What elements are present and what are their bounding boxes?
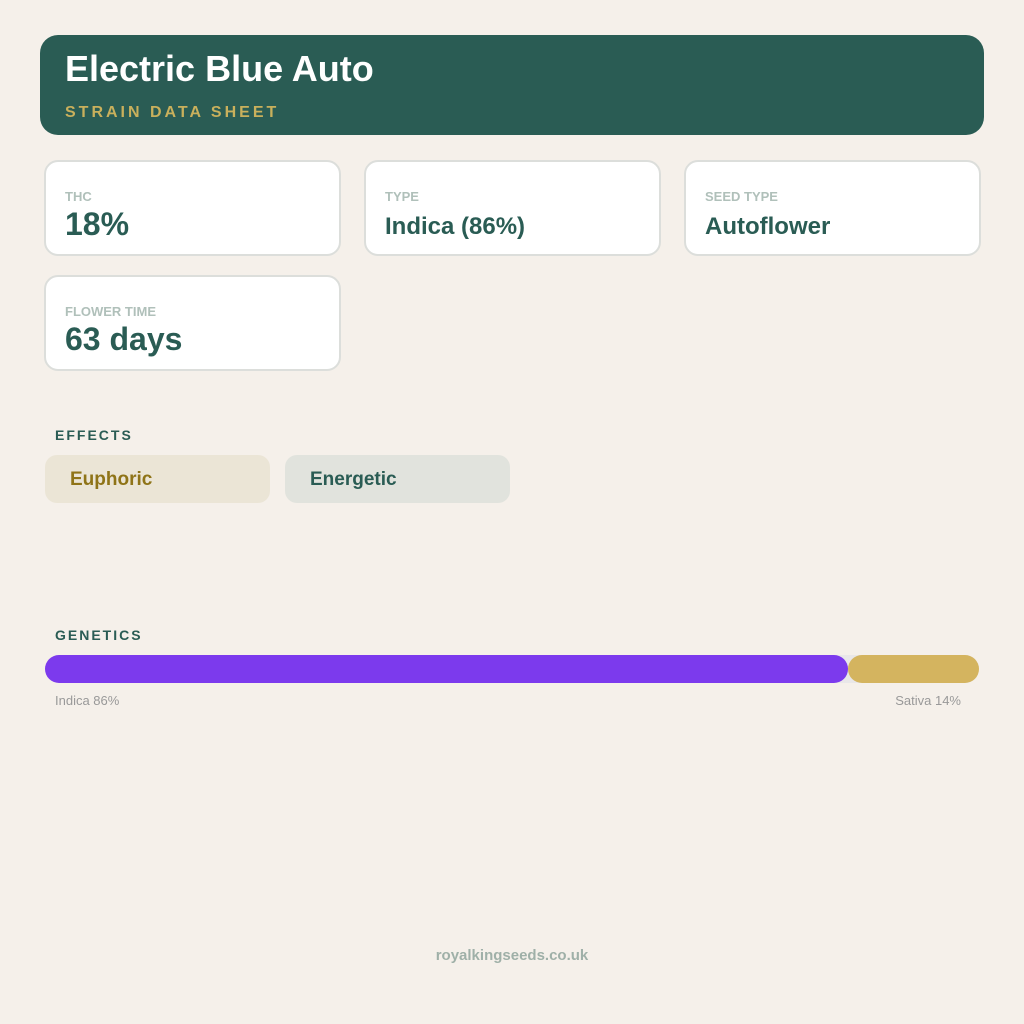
value: 63 days: 63 days — [65, 321, 182, 357]
label: flower time: FLOWER TIME — [65, 304, 156, 319]
label: THC: THC — [65, 189, 92, 204]
value: Autoflower: Autoflower — [705, 213, 830, 240]
effect tag: Euphoric: Euphoric — [70, 469, 152, 490]
stat card: seed type — [684, 160, 981, 256]
effect tag: Energetic — [285, 455, 510, 503]
stat card: type — [364, 160, 661, 256]
title: Electric Blue Auto — [65, 48, 374, 89]
footer source: royalkingseeds.co.uk — [436, 947, 588, 964]
header banner — [40, 35, 984, 135]
effects heading: EFFECTS — [55, 427, 133, 443]
sativa label: Sativa 14% — [895, 693, 961, 708]
value: 18%: 18% — [65, 206, 129, 242]
stat card: flower time — [44, 275, 341, 371]
subtitle: STRAIN DATA SHEET — [65, 104, 279, 121]
indica label: Indica 86% — [55, 693, 119, 708]
genetics heading: GENETICS — [55, 627, 143, 643]
stat card: THC — [44, 160, 341, 256]
genetics bar — [45, 655, 979, 683]
label: type: TYPE — [385, 189, 419, 204]
indica segment — [45, 655, 848, 683]
sativa segment — [848, 655, 979, 683]
effect tag: Euphoric — [45, 455, 270, 503]
effect tag: Energetic: Energetic — [310, 469, 397, 490]
value: Indica: Indica (86%) — [385, 213, 525, 240]
label: seed type: SEED TYPE — [705, 189, 778, 204]
